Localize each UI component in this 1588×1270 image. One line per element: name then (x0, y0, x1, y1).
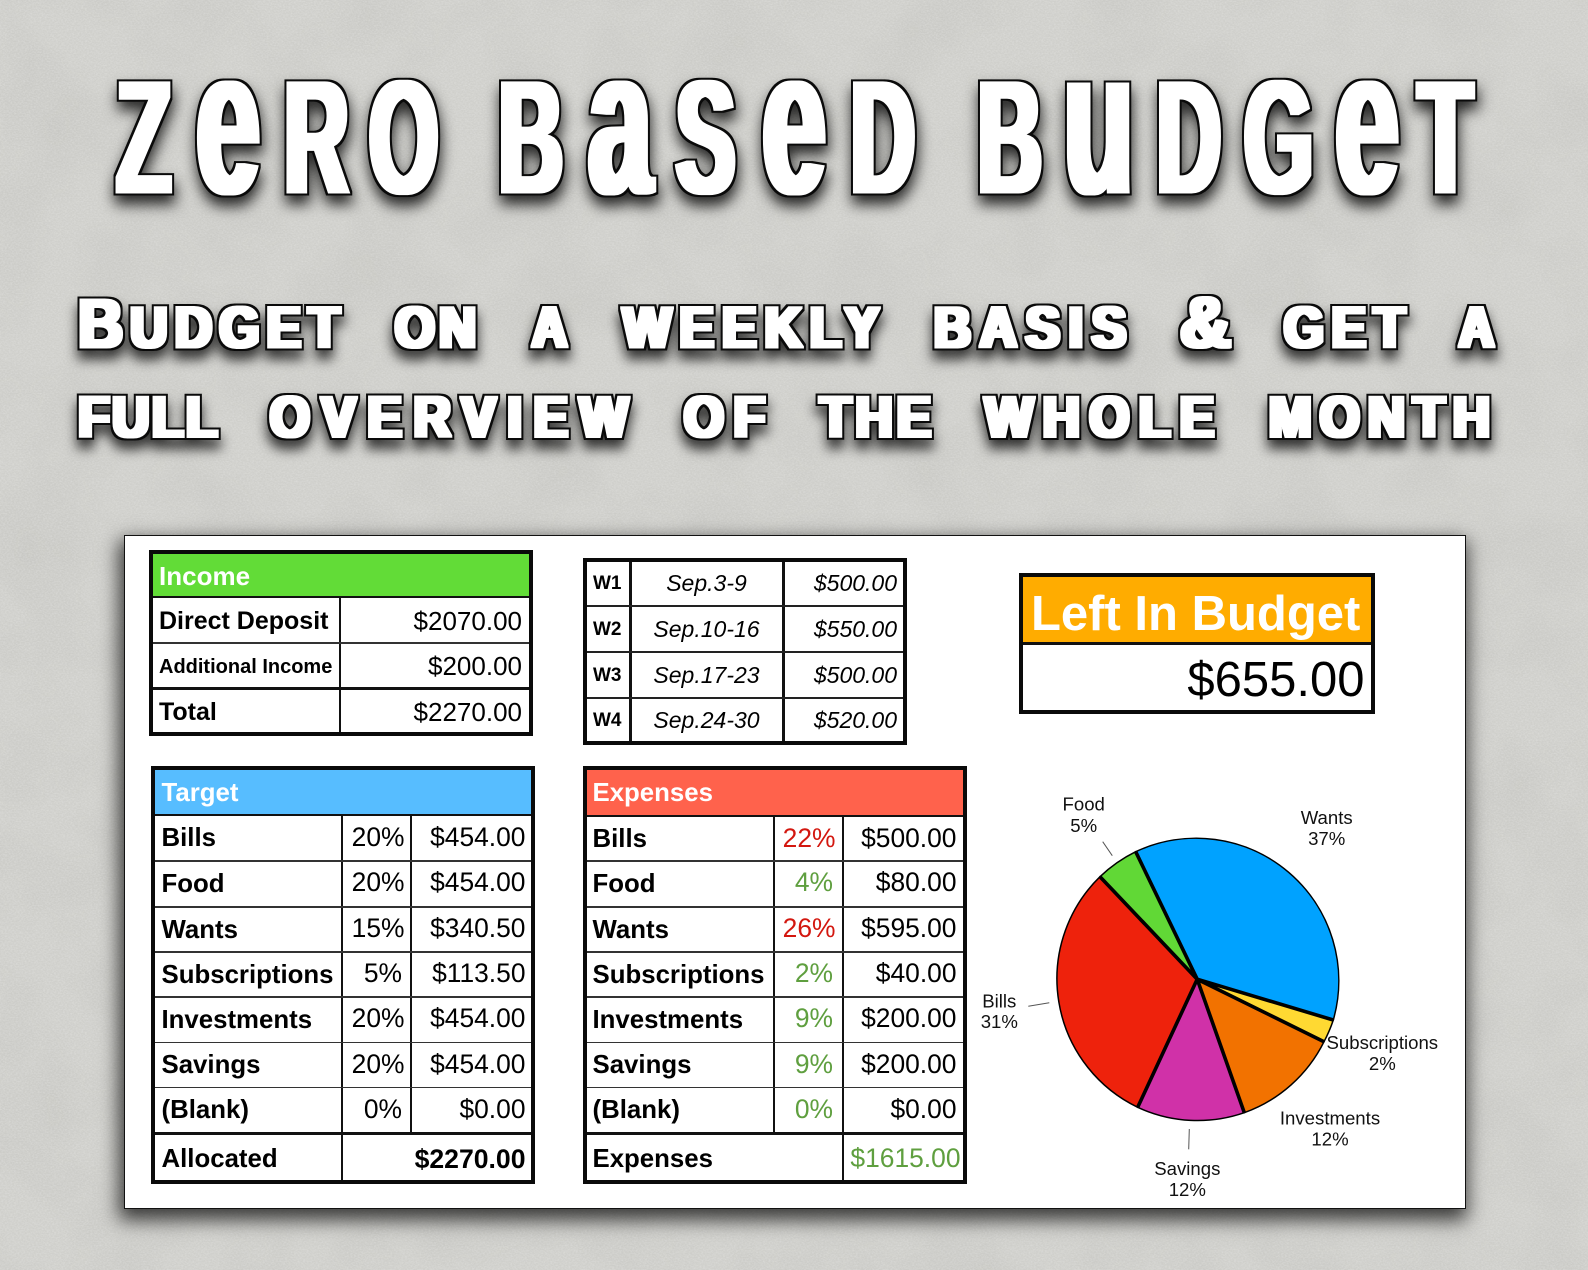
leader lines (1028, 842, 1189, 1149)
subtitle: BUDGET (78, 284, 340, 362)
table: target: $113.50 (432, 958, 526, 988)
table: target: $2270.00 (415, 1144, 526, 1174)
table: expenses: 2% (795, 958, 833, 988)
pie labels: Subscriptions (1326, 1032, 1438, 1053)
table: target: 0% (364, 1094, 402, 1124)
subtitle: THE (820, 385, 931, 450)
pie labels: 2% (1369, 1053, 1396, 1074)
pie labels: Bills (982, 990, 1016, 1012)
table: expenses: 9% (795, 1048, 833, 1078)
table: weekly budget: W3 (593, 664, 622, 686)
subtitle: FULL (78, 385, 217, 450)
table: income: Additional Income (159, 656, 332, 678)
pie labels: 37% (1308, 828, 1345, 849)
slice: bills (1057, 877, 1197, 1107)
table: weekly budget: Sep.17-23 (653, 662, 760, 688)
table: weekly budget: Sep.10-16 (653, 616, 760, 642)
table: target: $0.00 (459, 1094, 526, 1124)
table: weekly budget: $500.00 (814, 570, 897, 596)
table: expenses: $0.00 (890, 1094, 956, 1124)
table: target: $454.00 (430, 1048, 526, 1078)
subtitle: OVERVIEW (270, 385, 628, 450)
subtitle: ON (395, 295, 476, 360)
slice: savings (1138, 979, 1244, 1121)
callout: left in budget: $655.00 (1187, 653, 1364, 707)
title: ZeRO (117, 3, 438, 238)
table: weekly budget: W1 (593, 573, 622, 594)
subtitle: OF (684, 385, 765, 450)
table: target: (Blank) (162, 1096, 249, 1124)
slice: investments (1197, 979, 1324, 1113)
subtitle: WHOLE (985, 385, 1214, 450)
table: expenses: 26% (783, 913, 836, 943)
title (104, 3, 1489, 238)
table: expenses: (Blank) (592, 1096, 680, 1124)
callout: left in budget (1018, 572, 1374, 714)
subtitle (67, 284, 1506, 459)
table: expenses: $1615.00 (850, 1142, 960, 1172)
table: expenses: $200.00 (861, 1003, 956, 1033)
pie labels: Wants (1301, 807, 1353, 828)
pie labels: 12% (1169, 1179, 1206, 1200)
table: weekly budget: Sep.3-9 (666, 570, 747, 596)
table: target: 20% (352, 867, 404, 897)
table: target: 20% (352, 822, 404, 852)
table: income: Income (159, 560, 250, 590)
table: expenses: 9% (795, 1003, 833, 1033)
table: income: $200.00 (428, 650, 522, 680)
subtitle: WEEKLY (623, 295, 879, 360)
subtitle: & (1180, 284, 1231, 363)
title: BuDGeT (978, 3, 1472, 238)
subtitle: BASIS (934, 295, 1126, 360)
table: expenses: Bills (592, 824, 647, 852)
slice separators (1100, 852, 1333, 1113)
pie labels (981, 794, 1438, 1200)
pie labels: Investments (1280, 1108, 1380, 1128)
table: expenses: $200.00 (861, 1048, 956, 1078)
subtitle: GET (1284, 295, 1405, 360)
title: BaSeD (499, 3, 915, 238)
table: expenses: Wants (592, 916, 669, 944)
table: weekly budget: $520.00 (814, 707, 897, 733)
table: expenses: $595.00 (861, 913, 956, 943)
table: expenses: Expenses (592, 778, 713, 806)
table: weekly budget: $550.00 (814, 616, 897, 642)
table: expenses: Investments (592, 1006, 743, 1034)
table: expenses (582, 766, 966, 1184)
table: target: Target (162, 778, 238, 806)
table: income: $2270.00 (414, 696, 522, 726)
table: target: Savings (162, 1051, 260, 1079)
table: expenses: 22% (783, 822, 836, 852)
table: expenses: Expenses (592, 1144, 713, 1172)
table: expenses: Food (592, 870, 656, 898)
pie labels: 12% (1311, 1128, 1349, 1150)
table: income (149, 550, 533, 736)
table: expenses: $80.00 (876, 867, 956, 897)
table: target: Food (162, 870, 225, 898)
subtitle: A (1459, 295, 1494, 360)
table: income: Direct Deposit (159, 606, 328, 634)
table: weekly budget: W2 (593, 618, 622, 640)
pie labels: 31% (981, 1011, 1018, 1032)
subtitle: A (532, 295, 567, 360)
table: weekly budget: $500.00 (814, 662, 897, 688)
table: expenses: $500.00 (861, 822, 956, 852)
table: income: $2070.00 (414, 606, 522, 636)
pie labels: Food (1063, 794, 1105, 814)
table: target: $340.50 (430, 913, 526, 943)
table: target: Wants (162, 916, 238, 944)
table: target: 15% (352, 913, 404, 943)
table: target: Allocated (162, 1144, 278, 1172)
table: income: Total (159, 698, 217, 726)
table: expenses: $40.00 (876, 958, 956, 988)
table: expenses: 4% (795, 867, 833, 897)
table: expenses: Savings (592, 1051, 691, 1079)
slice: food (1100, 852, 1197, 979)
table: target: Subscriptions (162, 960, 334, 988)
table: target: $454.00 (430, 822, 526, 852)
table: target: Investments (162, 1006, 312, 1034)
table: target: 20% (352, 1048, 404, 1078)
table: target (151, 766, 535, 1184)
table: expenses: Subscriptions (592, 960, 765, 988)
callout: left in budget: Left In Budget (1031, 586, 1360, 640)
slice: wants (1136, 838, 1339, 1020)
table: weekly budget: W4 (593, 710, 622, 731)
table: target: 20% (352, 1003, 404, 1033)
slice: subscriptions (1197, 979, 1333, 1042)
pie labels: Savings (1154, 1158, 1220, 1179)
panel: white budget sheet (124, 535, 1466, 1209)
table: target: $454.00 (430, 867, 526, 897)
table: weekly budget: Sep.24-30 (653, 707, 760, 733)
table: weekly budget (583, 558, 907, 745)
table: target: Bills (162, 824, 216, 852)
subtitle: MONTH (1269, 385, 1490, 450)
table: expenses: 0% (795, 1094, 833, 1124)
table: target: 5% (364, 958, 402, 988)
pie labels: 5% (1070, 815, 1097, 836)
table: target: $454.00 (430, 1003, 526, 1033)
